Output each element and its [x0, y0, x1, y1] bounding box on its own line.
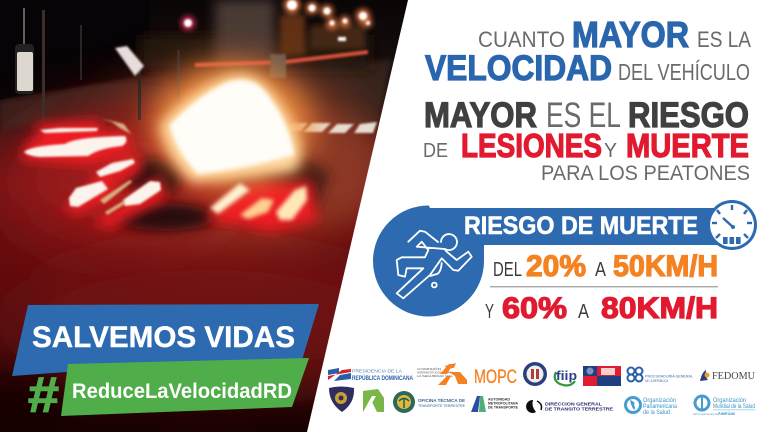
- white content panel: [307, 0, 768, 432]
- logo: green runner mark: [363, 389, 384, 412]
- logo: organización panamericana de la salud: Organización: [643, 398, 676, 404]
- headline: risk: DE: [423, 140, 448, 162]
- icon: speedometer clock: [707, 200, 757, 250]
- logo: oficina técnica: [393, 391, 465, 413]
- headline: risk: ES EL: [546, 96, 621, 135]
- banner: salvemos vidas: [12, 304, 319, 423]
- icon: running pedestrian: [397, 231, 472, 298]
- stat: 60% at 80 km/h: Y: [485, 301, 494, 323]
- logo: fedomu: [700, 370, 756, 382]
- street poles and signage: [42, 10, 45, 120]
- logo: organización mundial de la salud: Mundial de la Salud: [713, 404, 755, 410]
- white reflective streaks: [24, 118, 161, 215]
- logo: comisión seguridad vial: COMISIÓN: [417, 366, 441, 371]
- stat: 60% at 80 km/h: 60%: [502, 292, 567, 325]
- logo: fiip: fiip: [556, 368, 577, 383]
- photo: night-time crash scene: [0, 0, 410, 432]
- logo: dirección general: [526, 400, 613, 413]
- logo: blue and red institution: [583, 366, 621, 386]
- logo: autoridad metropolitana: METROPOLITANA: [488, 402, 519, 406]
- logo: mopc: MOPC: [474, 367, 517, 388]
- headline: speed: [425, 14, 751, 88]
- fireball: [152, 63, 312, 187]
- stat: 20% at 50 km/h: [493, 250, 718, 283]
- stat: 60% at 80 km/h: A: [578, 301, 590, 323]
- blue banner shape: [12, 304, 319, 376]
- logo: presidencia: PRESIDENCIA DE LA: [352, 368, 402, 374]
- vehicle blobs: [129, 158, 181, 198]
- logo: presidencia: [328, 368, 413, 382]
- headline: risk: LESIONES: [461, 127, 602, 164]
- stat: 20% at 50 km/h: DEL: [493, 259, 522, 281]
- stat: 60% at 80 km/h: 80KM/H: [601, 292, 718, 325]
- logo: organización mundial de la salud: oficina regional para las: [693, 412, 718, 416]
- logo: comisión seguridad vial: INTERINSTITUCIONAL PARA: [417, 370, 453, 374]
- banner heading: SALVEMOS VIDAS: [32, 321, 295, 354]
- logo: organización mundial de la salud: Organización: [713, 398, 746, 404]
- green hashtag shape: [61, 358, 309, 416]
- stat: 20% at 50 km/h: 50KM/H: [613, 250, 718, 283]
- headline: speed: CUANTO: [478, 27, 565, 52]
- logo: procuraduría: PROCURADURÍA GENERAL: [645, 374, 693, 378]
- headline: risk: PARA LOS PEATONES: [541, 162, 750, 185]
- logo: organización panamericana de la salud: Panamericana: [643, 404, 678, 410]
- logo: fedomu: FEDOMU: [712, 371, 756, 382]
- logo: oficina técnica: OFICINA TÉCNICA DE: [418, 398, 465, 403]
- headline: speed: ES LA: [697, 27, 751, 52]
- logo strip: [328, 362, 756, 416]
- stat: 20% at 50 km/h: 20%: [526, 250, 586, 283]
- stat: 20% at 50 km/h: A: [595, 259, 607, 281]
- logo: autoridad metropolitana: [471, 396, 519, 412]
- panel: riesgo de muerte: [373, 200, 757, 325]
- headline: risk: RIESGO: [628, 96, 749, 135]
- logo: presidencia: REPÚBLICA DOMINICANA: [352, 373, 413, 382]
- red road lights: [195, 50, 368, 67]
- logo: oficina técnica: TRANSPORTE TERRESTRE: [418, 403, 465, 408]
- logo: procuraduría: DE LA REPÚBLICA: [645, 378, 668, 383]
- logo: police shield: [329, 386, 354, 412]
- logo: dirección general: DIRECCION GENERAL: [545, 402, 603, 406]
- headline: risk: MAYOR: [424, 96, 537, 135]
- logo: procuraduría: [628, 368, 693, 383]
- stat: 60% at 80 km/h: [485, 292, 718, 325]
- headline: speed: VELOCIDAD: [425, 49, 612, 88]
- blue header shape: [373, 205, 735, 316]
- logo: autoridad metropolitana: AUTORIDAD: [488, 398, 511, 402]
- distant street lights: [181, 0, 372, 55]
- headline: risk: MUERTE: [626, 127, 749, 164]
- headline: risk: Y: [604, 140, 617, 162]
- logo: comisión seguridad vial: LA SEGURIDAD VIAL: [417, 374, 453, 378]
- logo: dirección general: DE TRANSITO TERRESTRE: [545, 406, 613, 412]
- logo: organización panamericana de la salud: de la Salud: [643, 410, 670, 416]
- headline: speed: MAYOR: [572, 14, 689, 55]
- logo: autoridad metropolitana: DE TRANSPORTE: [488, 406, 519, 410]
- logo: national shield seal: [523, 362, 547, 386]
- logo: organización mundial de la salud: Américas: [718, 411, 735, 416]
- hash symbol: #: [28, 367, 59, 423]
- logo: organización panamericana de la salud: [624, 396, 678, 416]
- logo: organización mundial de la salud: [693, 394, 755, 416]
- logo: comisión seguridad vial: [417, 363, 467, 385]
- headline: risk: [423, 96, 750, 185]
- crosswalk: [285, 122, 377, 133]
- red glow around reflections: [20, 120, 318, 232]
- hashtag text: ReduceLaVelocidadRD: [72, 380, 292, 403]
- panel heading: RIESGO DE MUERTE: [464, 212, 698, 240]
